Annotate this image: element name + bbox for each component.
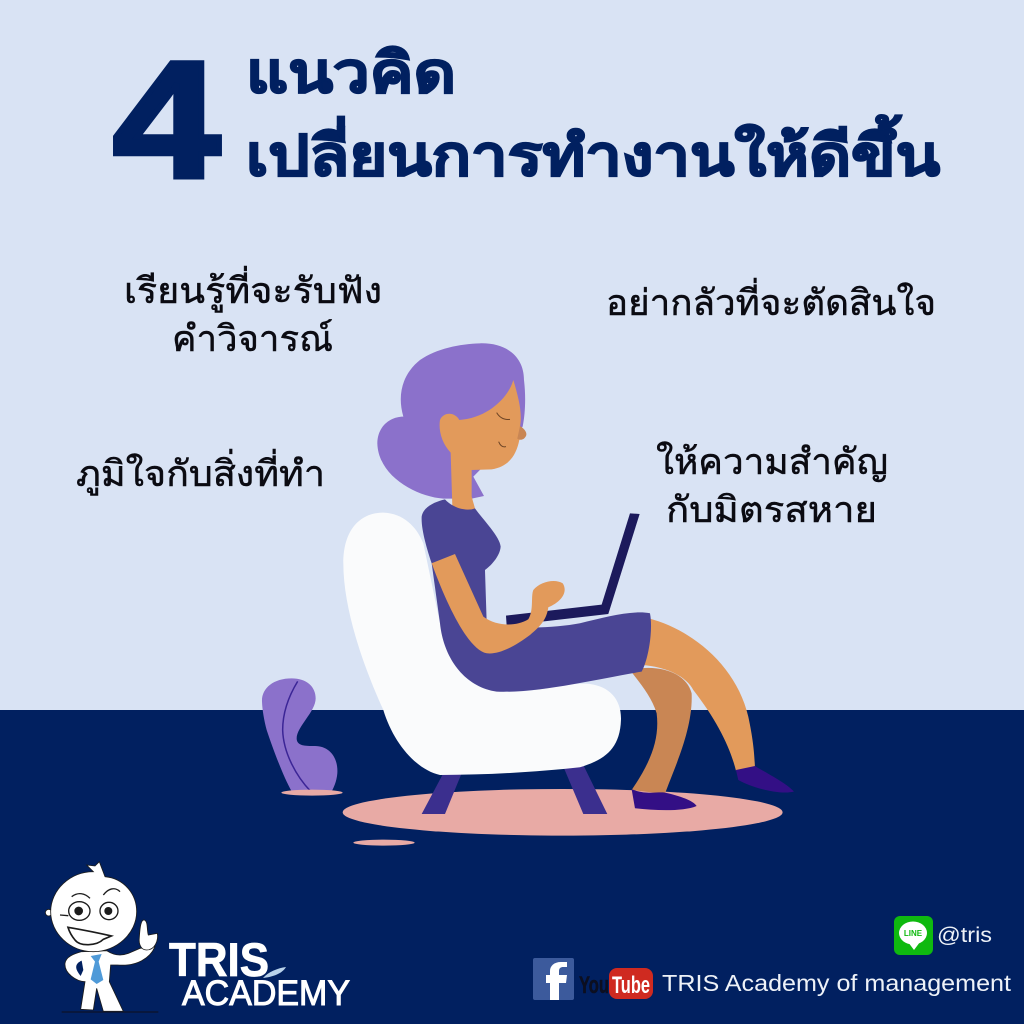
text block: learn to listen to criticism <box>124 266 382 359</box>
body <box>65 947 155 1011</box>
icon: plant <box>262 678 343 796</box>
text: line handle: @tris <box>937 924 992 947</box>
dress <box>422 499 651 692</box>
feather <box>263 967 286 978</box>
tie <box>91 954 103 984</box>
eyes <box>69 902 90 920</box>
text: channel name: TRIS Academy of management <box>662 970 1012 996</box>
arm <box>432 554 565 653</box>
chair legs <box>422 765 607 814</box>
hair <box>377 343 525 499</box>
icon: Facebook <box>533 958 574 1000</box>
text block: value your colleagues: ให้ความสำคัญ <box>656 441 888 482</box>
shoes <box>632 766 794 810</box>
laptop <box>506 513 640 626</box>
text block: do not fear making decisions: อย่ากลัวที่จะตัดสินใจ <box>606 278 936 323</box>
far leg <box>630 668 692 794</box>
icon: LINE: LINE <box>904 929 923 938</box>
logo: TRIS ACADEMY <box>169 933 350 1013</box>
illustration: woman on chair with laptop <box>343 343 794 846</box>
icon: YouTube <box>579 968 653 999</box>
chair <box>343 513 621 775</box>
mouth <box>68 927 111 945</box>
title: แนวคิด <box>246 41 456 104</box>
title number 4: 4 <box>113 28 220 213</box>
neck and face <box>440 380 526 517</box>
brows <box>60 889 120 916</box>
shadow <box>62 1009 158 1014</box>
icon: LINE <box>894 916 933 955</box>
title: เปลี่ยนการทำงานให้ดีขึ้น <box>246 115 940 187</box>
arm gap <box>76 961 83 976</box>
text block: be proud of what you do: ภูมิใจกับสิ่งที่ทำ <box>76 449 325 496</box>
logo: TRIS ACADEMY: ACADEMY <box>182 974 350 1013</box>
thumb <box>139 920 158 950</box>
mascot <box>45 862 158 1012</box>
small rug <box>353 840 415 846</box>
text block: value your colleagues <box>656 441 888 530</box>
title <box>246 41 940 187</box>
rug <box>343 789 783 836</box>
ears <box>45 909 52 916</box>
text block: learn to listen to criticism: เรียนรู้ที่จะรับฟัง <box>124 266 382 313</box>
nose <box>517 426 526 440</box>
near leg <box>642 618 755 771</box>
eye and mouth <box>497 413 510 447</box>
icon: YouTube: You <box>579 972 609 999</box>
text block: value your colleagues: กับมิตรสหาย <box>666 489 877 530</box>
head <box>51 862 137 952</box>
text block: learn to listen to criticism: คำวิจารณ์ <box>172 318 333 359</box>
logo: TRIS ACADEMY: TRIS <box>169 933 269 986</box>
icon: YouTube: Tube <box>612 972 650 999</box>
